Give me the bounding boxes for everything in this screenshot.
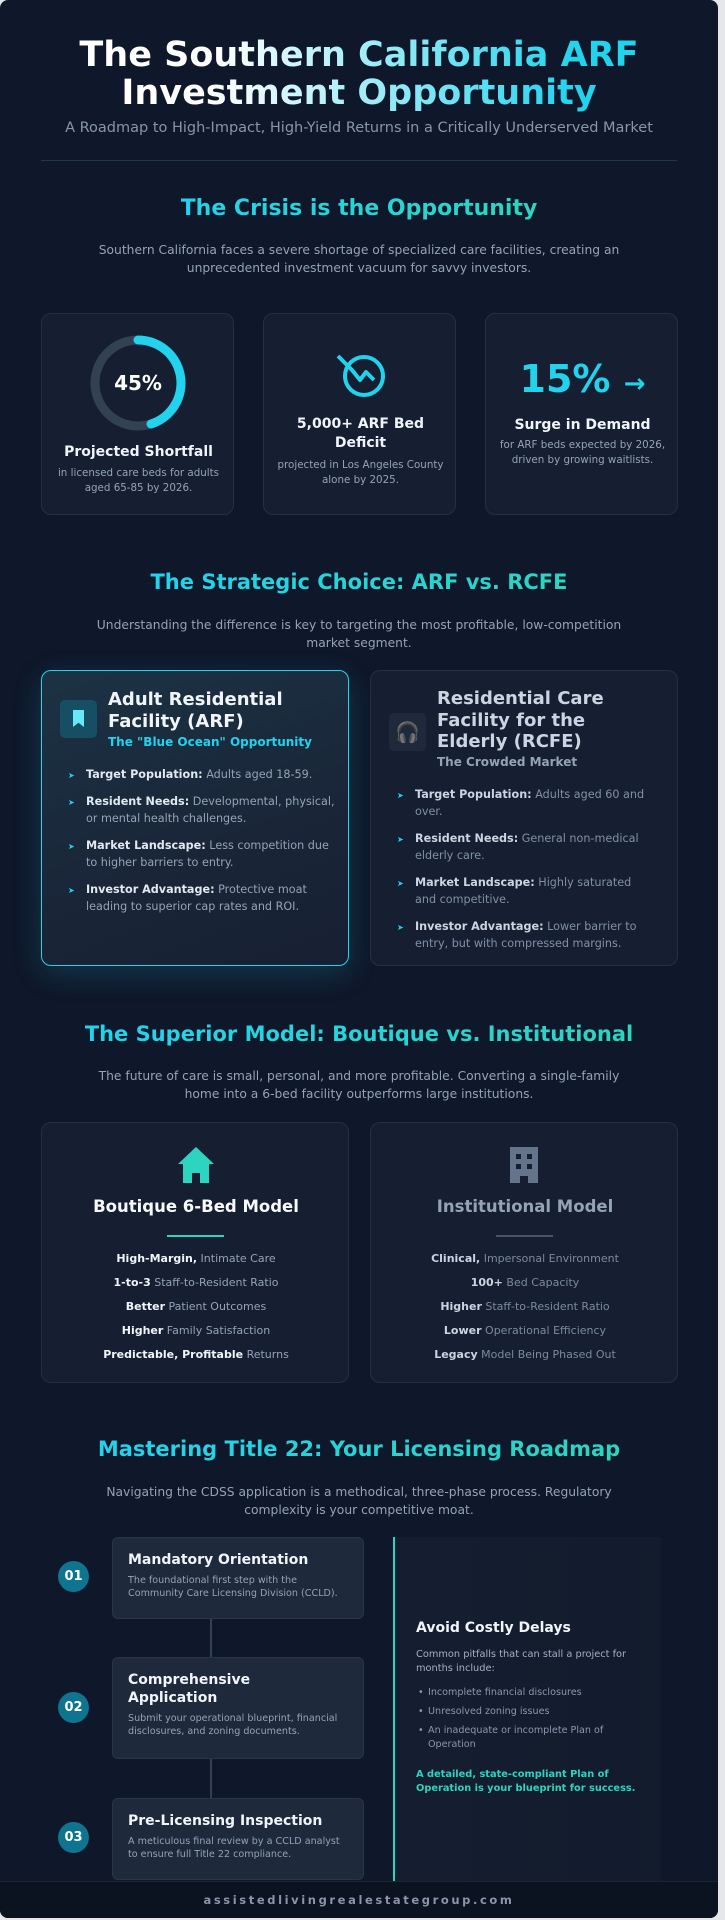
icon: house bbox=[178, 1147, 214, 1183]
bullets: Market Landscape: Highly saturated and competitive. bbox=[415, 876, 631, 906]
features: Higher Staff-to-Resident Ratio bbox=[440, 1300, 610, 1313]
title: Facility for the bbox=[437, 710, 585, 730]
stat card: surge bbox=[485, 313, 678, 515]
title: Adult Residential bbox=[108, 689, 283, 710]
stat card: deficit bbox=[263, 313, 456, 515]
icon: building bbox=[510, 1147, 538, 1183]
panel: RCFE bbox=[370, 670, 678, 966]
big number: 15% → bbox=[520, 357, 645, 401]
label bbox=[297, 416, 424, 451]
step 1: The foundational first step with the Community Care Licensing Division (CCLD). bbox=[128, 1575, 338, 1599]
panel: ARF: The "Blue Ocean" Opportunity bbox=[108, 735, 312, 749]
callout: avoid costly delays: A detailed, state-compliant Plan of Operation is your blueprint for success. bbox=[416, 1769, 635, 1794]
bullets: Market Landscape: Less competition due to higher barriers to entry. bbox=[86, 839, 329, 869]
step 2: Comprehensive bbox=[128, 1672, 250, 1688]
donut chart bbox=[90, 336, 186, 430]
text: title 22 intro: Navigating the CDSS application is a methodical, three-phase process. Regulatory complexity is your competitive moat. bbox=[106, 1485, 612, 1517]
step 3 bbox=[58, 1798, 364, 1880]
callout: avoid costly delays: Unresolved zoning issues bbox=[428, 1706, 550, 1717]
stat card: surge: Surge in Demand bbox=[514, 417, 651, 433]
title: Elderly (RCFE) bbox=[437, 731, 582, 752]
title: Facility (ARF) bbox=[108, 711, 244, 732]
bullets: Investor Advantage: Protective moat leading to superior cap rates and ROI. bbox=[86, 883, 307, 913]
features: 1-to-3 Staff-to-Resident Ratio bbox=[113, 1276, 279, 1289]
callout: avoid costly delays: Common pitfalls that can stall a project for months include: bbox=[416, 1649, 626, 1674]
title: The Southern California ARF bbox=[79, 35, 639, 75]
bullets: Target Population: Adults aged 18-59. bbox=[86, 768, 312, 781]
label: Projected Shortfall bbox=[64, 444, 213, 460]
footer: assistedlivingrealestategroup.com bbox=[204, 1893, 514, 1907]
panel: RCFE: The Crowded Market bbox=[437, 755, 577, 769]
icon: headset: 🎧 bbox=[395, 720, 420, 744]
bullets: Target Population: Adults aged 60 and over. bbox=[415, 788, 644, 818]
callout: avoid costly delays: An inadequate or incomplete Plan of Operation bbox=[428, 1725, 603, 1750]
connector line bbox=[210, 1618, 212, 1798]
heading: superior model: The Superior Model: Boutique vs. Institutional bbox=[85, 1022, 633, 1046]
step 2: 02 bbox=[64, 1700, 83, 1715]
callout: avoid costly delays: Avoid Costly Delays bbox=[416, 1620, 571, 1636]
panel: institutional bbox=[370, 1122, 678, 1383]
panel: boutique bbox=[41, 1122, 349, 1383]
step 1: 01 bbox=[64, 1569, 83, 1584]
heading: strategic choice: The Strategic Choice: ARF vs. RCFE bbox=[150, 570, 568, 594]
label: 5,000+ ARF Bed bbox=[297, 416, 424, 432]
stat card: surge: for ARF beds expected by 2026, driven by growing waitlists. bbox=[500, 439, 665, 466]
features bbox=[431, 1252, 619, 1361]
step 3: Pre-Licensing Inspection bbox=[128, 1813, 322, 1829]
step 3: A meticulous final review by a CCLD analyst to ensure full Title 22 compliance. bbox=[128, 1836, 340, 1860]
title: Institutional Model bbox=[437, 1197, 613, 1216]
callout: avoid costly delays bbox=[393, 1537, 661, 1881]
step 1: Mandatory Orientation bbox=[128, 1552, 308, 1568]
step 2 bbox=[58, 1657, 364, 1759]
subtitle: A Roadmap to High-Impact, High-Yield Returns in a Critically Underserved Market bbox=[65, 120, 653, 136]
features: High-Margin, Intimate Care bbox=[116, 1252, 276, 1265]
panel: ARF bbox=[41, 670, 349, 966]
title bbox=[0, 36, 718, 112]
bullets: Resident Needs: Developmental, physical, or mental health challenges. bbox=[86, 795, 335, 825]
features: Legacy Model Being Phased Out bbox=[434, 1348, 616, 1361]
title: Boutique 6-Bed Model bbox=[93, 1197, 299, 1216]
text: crisis intro: Southern California faces a severe shortage of specialized care facilities, creating an unprecedented investment vacuum for savvy investors. bbox=[99, 243, 619, 275]
bullets: Investor Advantage: Lower barrier to entry, but with compressed margins. bbox=[415, 920, 637, 950]
features: 100+ Bed Capacity bbox=[471, 1276, 579, 1289]
title bbox=[437, 688, 604, 752]
heading: title 22: Mastering Title 22: Your Licensing Roadmap bbox=[98, 1437, 620, 1461]
step 2: Submit your operational blueprint, financial disclosures, and zoning documents. bbox=[128, 1713, 337, 1737]
text: strategic intro: Understanding the difference is key to targeting the most profitable, low-competition market segment. bbox=[97, 618, 621, 650]
step 3: 03 bbox=[64, 1830, 83, 1845]
features bbox=[103, 1252, 289, 1361]
title: Residential Care bbox=[437, 688, 604, 709]
icon: headset bbox=[389, 713, 426, 751]
step 2: Application bbox=[128, 1690, 217, 1706]
footer bbox=[0, 1881, 718, 1918]
label: Deficit bbox=[335, 435, 386, 451]
features: Higher Family Satisfaction bbox=[122, 1324, 270, 1337]
features: Better Patient Outcomes bbox=[126, 1300, 266, 1313]
stat card: deficit: projected in Los Angeles County alone by 2025. bbox=[278, 459, 443, 486]
title bbox=[108, 689, 283, 732]
bullets bbox=[398, 788, 644, 950]
title: Investment Opportunity bbox=[121, 73, 597, 113]
stat card: shortfall bbox=[41, 313, 234, 515]
stat card: shortfall: in licensed care beds for adults aged 65-85 by 2026. bbox=[58, 467, 219, 494]
bullets: Resident Needs: General non-medical elderly care. bbox=[415, 832, 639, 862]
callout: avoid costly delays: Incomplete financial disclosures bbox=[428, 1687, 582, 1698]
features: Lower Operational Efficiency bbox=[444, 1324, 606, 1337]
icon: bookmark bbox=[60, 700, 97, 738]
features: Predictable, Profitable Returns bbox=[103, 1348, 289, 1361]
heading: crisis: The Crisis is the Opportunity bbox=[181, 196, 537, 221]
features: Clinical, Impersonal Environment bbox=[431, 1252, 619, 1265]
icon: chart down bbox=[336, 354, 385, 397]
bullets bbox=[69, 768, 335, 913]
step 1 bbox=[58, 1537, 364, 1619]
donut chart: 45% bbox=[114, 371, 162, 395]
text: superior intro: The future of care is small, personal, and more profitable. Converting a single-family home into a 6-bed facility outperforms large institutions. bbox=[99, 1069, 619, 1101]
